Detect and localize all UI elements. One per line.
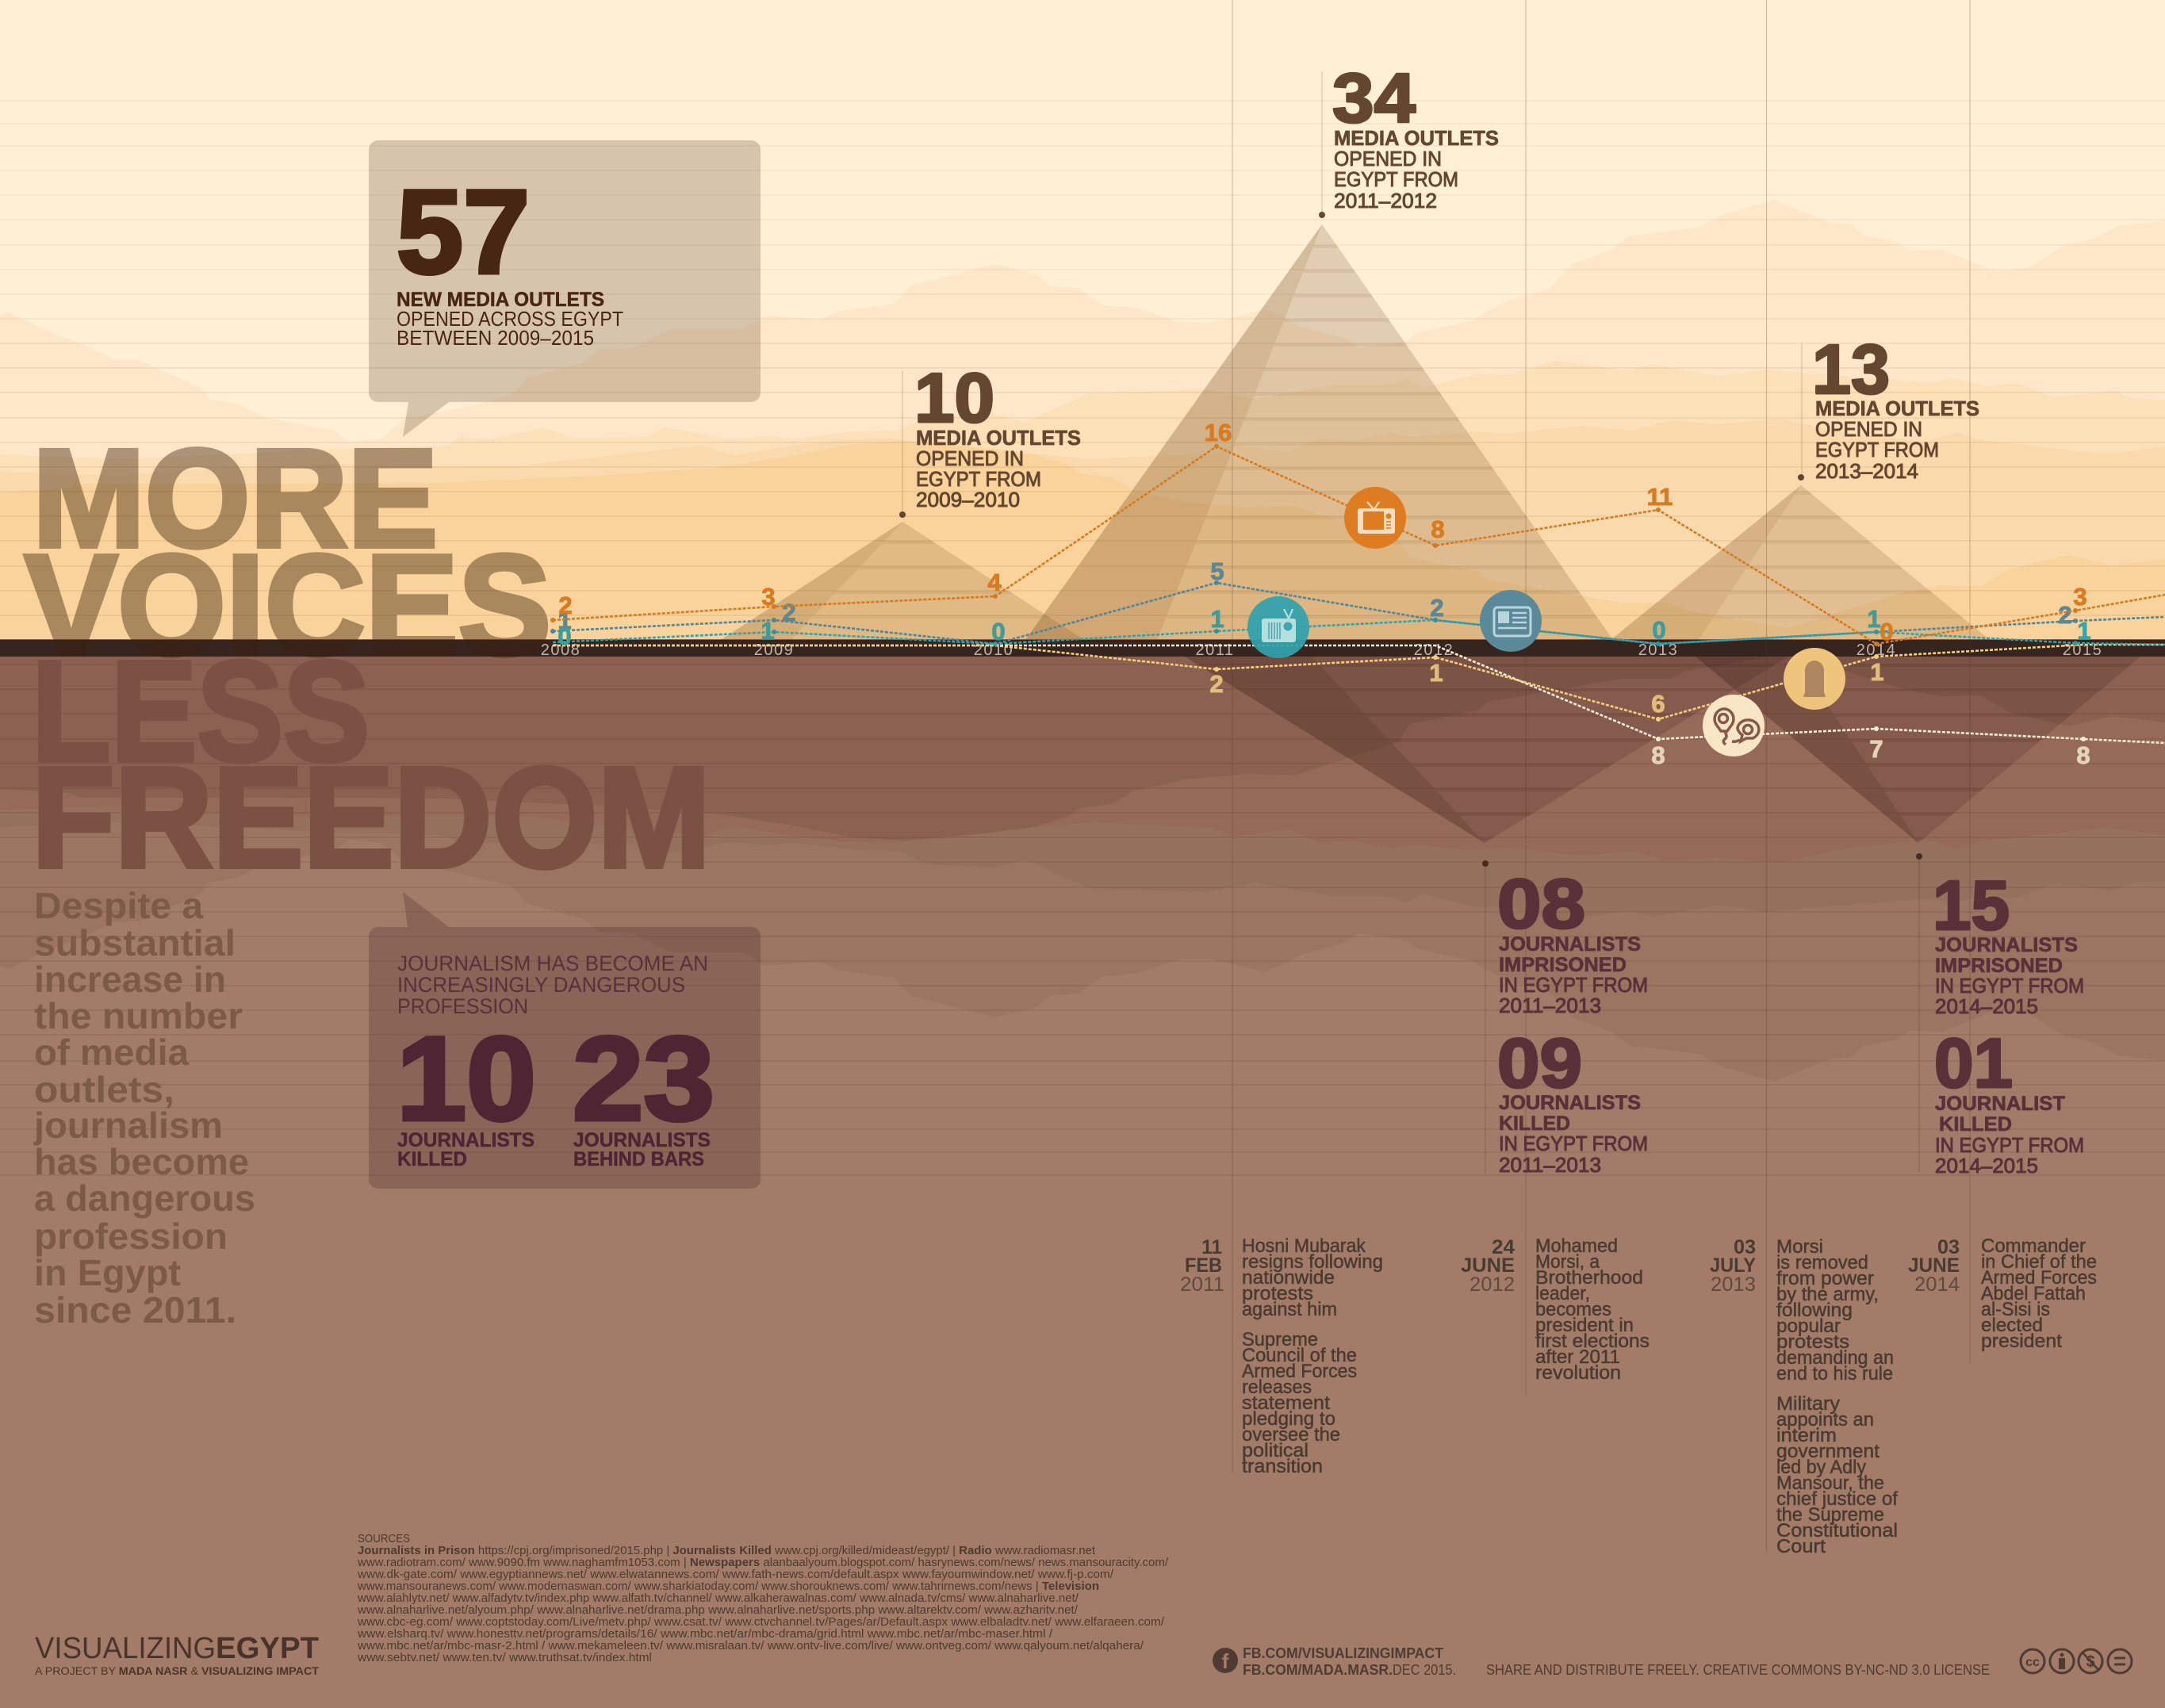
series: prisoners: 8 xyxy=(2076,741,2090,769)
description: statement xyxy=(1242,1392,1330,1414)
series: television: 3 xyxy=(761,583,776,611)
logo: Visualizing Egypt xyxy=(35,1632,319,1677)
stat: 01 killed: JOURNALIST xyxy=(1935,1093,2065,1115)
callout: 10 media outlets 2009-2010: EGYPT FROM xyxy=(916,467,1041,491)
panel intro: INCREASINGLY DANGEROUS xyxy=(397,973,685,997)
title word FREEDOM: FREEDOM xyxy=(32,738,711,898)
stat: 09 killed xyxy=(1497,1024,1648,1177)
stat: 01 killed: 01 xyxy=(1934,1024,2013,1102)
panel caption xyxy=(397,289,623,350)
stat: 08 imprisoned: 2011–2013 xyxy=(1499,994,1601,1017)
description: Brotherhood xyxy=(1535,1267,1643,1289)
series: newspapers: 2 xyxy=(1430,594,1444,622)
description: Morsi, a xyxy=(1535,1251,1600,1273)
event: 24 June 2012 xyxy=(1461,1235,1650,1384)
description: al-Sisi is xyxy=(1981,1299,2050,1320)
date: 2013 xyxy=(1711,1273,1756,1296)
callout: 13 media outlets 2013-2014: 2013–2014 xyxy=(1815,459,1918,483)
panel intro xyxy=(397,952,708,1018)
sources: www.elsharq.tv/ www.honesttv.net/programs/details/16/ www.mbc.net/ar/mbc-drama/grid.html www.mbc.net/ar/mbc-maser.html / xyxy=(357,1627,1053,1641)
callout: 34 media outlets 2011-2012: 2011–2012 xyxy=(1334,189,1437,213)
intro paragraph: a dangerous xyxy=(34,1178,255,1219)
date: 2012 xyxy=(1470,1273,1515,1296)
callout: 34 media outlets 2011-2012: MEDIA OUTLETS xyxy=(1334,126,1499,150)
description: against him xyxy=(1242,1299,1337,1320)
series: newspapers: 5 xyxy=(1210,557,1224,585)
stat: 01 killed: 2014–2015 xyxy=(1935,1154,2038,1178)
panel: dangerous profession xyxy=(369,892,761,1189)
line chart xyxy=(550,419,2165,769)
icon: creative commons badges: cc xyxy=(2025,1656,2040,1669)
sources: SOURCES xyxy=(358,1532,410,1545)
sources: www.cbc-eg.com/ www.coptstoday.com/Live/metv.php/ www.csat.tv/ www.ctvchannel.tv/Pages/ar/Default.aspx www.elbaladtv.net/ www.elfaraeen.com/ xyxy=(357,1615,1165,1629)
description: Armed Forces xyxy=(1981,1267,2097,1289)
year axis labels: 2014 xyxy=(1857,641,1896,659)
date: JUNE xyxy=(1461,1254,1515,1277)
description: Morsi xyxy=(1776,1236,1823,1258)
series: radio xyxy=(553,605,2165,650)
stat: 09 killed: 2011–2013 xyxy=(1499,1153,1601,1177)
series: prisoners xyxy=(553,645,2165,769)
sources: www.sebtv.net/ www.ten.tv/ www.truthsat.tv/index.html xyxy=(357,1651,652,1664)
series: television: 0 xyxy=(1880,618,1894,645)
series: television: 4 xyxy=(987,569,1002,596)
description: Mohamed xyxy=(1535,1235,1618,1257)
icon: television xyxy=(1344,487,1406,549)
description: interim xyxy=(1776,1425,1837,1446)
callout: 15 and 01 journalists 2014-2015 xyxy=(1916,853,2084,1178)
callout: 13 media outlets 2013-2014 xyxy=(1798,330,1979,483)
year axis labels: 2013 xyxy=(1638,641,1678,659)
stat: 01 killed: KILLED xyxy=(1939,1113,2012,1135)
logo: Visualizing Egypt: A PROJECT BY MADA NASR & VISUALIZING IMPACT xyxy=(35,1664,319,1677)
pyramid 2013-2014 xyxy=(1613,485,1989,640)
panel intro: PROFESSION xyxy=(397,994,528,1018)
footer: social links xyxy=(1213,1645,1456,1678)
panel caption: NEW MEDIA OUTLETS xyxy=(397,289,604,311)
intro paragraph: profession xyxy=(34,1216,228,1257)
series: television: 11 xyxy=(1647,483,1673,511)
callout: 08 and 09 journalists 2011-2013 xyxy=(1482,860,1648,1177)
description: Council of the xyxy=(1242,1345,1357,1366)
icon: facebook: f xyxy=(1222,1649,1229,1673)
panel intro: JOURNALISM HAS BECOME AN xyxy=(397,952,708,975)
stat: 10 journalists killed: KILLED xyxy=(397,1148,467,1170)
upper desert mountain layers xyxy=(0,200,2165,642)
intro paragraph: since 2011. xyxy=(34,1289,236,1331)
series: radio: 1 xyxy=(2077,617,2091,645)
description: by the army, xyxy=(1776,1284,1879,1305)
description: leader, xyxy=(1535,1283,1590,1304)
stat: 23 journalists behind bars: JOURNALISTS xyxy=(573,1129,711,1151)
background ground xyxy=(0,641,2165,1708)
date xyxy=(1180,1236,1224,1296)
icon: creative commons badges: $ xyxy=(2086,1653,2095,1671)
icon: handcuffs xyxy=(1703,695,1765,756)
description: popular xyxy=(1776,1315,1841,1337)
series: radio: 1 xyxy=(1210,605,1224,633)
description: led by Adly xyxy=(1776,1457,1866,1478)
date: 03 xyxy=(1937,1236,1960,1258)
stat: 15 imprisoned: 15 xyxy=(1933,866,2010,944)
upper pyramids xyxy=(714,224,2062,640)
stat: 08 imprisoned: IMPRISONED xyxy=(1499,954,1627,976)
pyramid 2009-2010 xyxy=(714,522,1110,640)
description: Mansour, the xyxy=(1776,1472,1884,1494)
footer: social links: FB.COM/MADA.MASR. xyxy=(1243,1662,1393,1678)
big number 57: 57 xyxy=(397,165,530,298)
year axis labels: 2009 xyxy=(754,641,794,659)
footer: license text: SHARE AND DISTRIBUTE FREELY. CREATIVE COMMONS BY-NC-ND 3.0 LICENSE xyxy=(1486,1662,1990,1678)
icon: creative commons badges xyxy=(2021,1649,2132,1673)
series: radio: 0 xyxy=(991,618,1006,645)
sources: www.dk-gate.com/ www.egyptiannews.net/ www.elwatannews.com/ www.fath-news.com/default.aspx www.fayoumwindow.net/ www.fj-p.com/ xyxy=(357,1568,1114,1581)
logo: Visualizing Egypt: EGYPT xyxy=(216,1632,319,1665)
series: television: 8 xyxy=(1431,515,1445,543)
callout: 13 media outlets 2013-2014: MEDIA OUTLETS xyxy=(1815,396,1979,420)
stat: 10 journalists killed: 10 xyxy=(397,1012,536,1145)
pyramid 2011-2012 xyxy=(1025,224,1665,640)
stat: 09 killed: JOURNALISTS xyxy=(1499,1092,1641,1114)
description: end to his rule xyxy=(1776,1363,1893,1384)
footer: social links: FB.COM/VISUALIZINGIMPACT xyxy=(1243,1645,1443,1661)
date xyxy=(1908,1236,1960,1296)
stat: 08 imprisoned: 08 xyxy=(1497,864,1585,943)
title word VOICES: VOICES xyxy=(25,526,551,685)
date: JULY xyxy=(1710,1254,1756,1277)
year axis labels: 2008 xyxy=(541,641,581,659)
series: television: 2 xyxy=(558,592,573,619)
description: pledging to xyxy=(1242,1408,1335,1430)
callout: 10 media outlets 2009-2010: OPENED IN xyxy=(916,446,1024,470)
logo: Visualizing Egypt: VISUALIZING xyxy=(35,1632,216,1665)
series: radio: 0 xyxy=(1652,616,1666,644)
date: 2011 xyxy=(1180,1273,1224,1296)
series: journalists killed: 1 xyxy=(1429,659,1443,687)
inverted pyramid 2011-2013 xyxy=(1185,657,1824,843)
description: Military xyxy=(1776,1393,1840,1415)
date: JUNE xyxy=(1908,1254,1960,1277)
sources: www.mansouranews.com/ www.modernaswan.com/ www.sharkiatoday.com/ www.shorouknews.com/ www.tahrirnews.com/news | Television xyxy=(357,1580,1099,1593)
series: newspapers: 2 xyxy=(2058,601,2072,629)
icon: newspaper xyxy=(1480,590,1542,652)
year axis labels: 2015 xyxy=(2063,641,2102,659)
description: president in xyxy=(1535,1315,1634,1336)
series: television: 3 xyxy=(2073,583,2087,611)
series: radio: 0 xyxy=(558,622,572,650)
callout: 34 media outlets 2011-2012: 34 xyxy=(1332,59,1416,137)
icon: facebook xyxy=(1213,1648,1238,1673)
date: 24 xyxy=(1492,1236,1515,1258)
series: television: 16 xyxy=(1205,419,1232,446)
description: president xyxy=(1981,1331,2062,1352)
event: 03 July 2013 xyxy=(1710,1236,1898,1557)
description xyxy=(1242,1235,1383,1477)
stat: 08 imprisoned xyxy=(1497,864,1648,1017)
description: from power xyxy=(1776,1268,1874,1289)
date: 2014 xyxy=(1914,1273,1960,1296)
lower reflected mountain layers xyxy=(0,639,2165,1082)
icon: radio xyxy=(1247,596,1309,658)
stat: 01 killed: IN EGYPT FROM xyxy=(1935,1133,2084,1157)
stat: 15 imprisoned xyxy=(1933,866,2084,1018)
intro paragraph: journalism xyxy=(33,1105,223,1146)
description: protests xyxy=(1242,1283,1313,1304)
callout: 34 media outlets 2011-2012: EGYPT FROM xyxy=(1334,167,1458,191)
description xyxy=(1981,1235,2097,1352)
sources xyxy=(357,1532,1169,1664)
sources: www.radiotram.com/ www.9090.fm www.naghamfm1053.com | Newspapers alanbaalyoum.blogspot.com/ hasrynews.com/news/ news.mansouracity.com/ xyxy=(357,1556,1169,1569)
description: Hosni Mubarak xyxy=(1242,1235,1366,1257)
stat: 23 journalists behind bars: 23 xyxy=(573,1012,715,1145)
sources: www.alnaharlive.net/alyoum.php/ www.alnaharlive.net/drama.php www.alnaharlive.net/sports.php www.altarektv.com/ www.azharitv.net/ xyxy=(357,1603,1079,1617)
event: 03 June 2014 xyxy=(1908,1235,2097,1352)
date: 03 xyxy=(1734,1236,1756,1258)
description: the Supreme xyxy=(1776,1504,1884,1526)
callout: 10 media outlets 2009-2010: 10 xyxy=(914,358,994,437)
series: newspapers xyxy=(550,557,2165,646)
series: journalists killed: 6 xyxy=(1651,690,1665,718)
description: political xyxy=(1242,1440,1309,1461)
series: prisoners: 7 xyxy=(1869,735,1883,763)
title word LESS: LESS xyxy=(32,632,370,791)
stat: 15 imprisoned: JOURNALISTS xyxy=(1935,934,2078,956)
date: FEB xyxy=(1185,1254,1222,1277)
event: 11 Feb 2011 xyxy=(1180,1235,1383,1477)
year axis labels: 2011 xyxy=(1195,641,1235,659)
description: in Chief of the xyxy=(1981,1251,2097,1273)
description: Court xyxy=(1776,1536,1826,1557)
stat: 08 imprisoned: JOURNALISTS xyxy=(1499,933,1641,955)
description: nationwide xyxy=(1242,1267,1335,1289)
series: journalists killed: 1 xyxy=(1870,658,1884,686)
stat: 09 killed: KILLED xyxy=(1499,1112,1570,1135)
stat: 15 imprisoned: IN EGYPT FROM xyxy=(1935,974,2084,998)
intro paragraph: increase in xyxy=(34,959,226,1000)
callout: 13 media outlets 2013-2014: 13 xyxy=(1812,330,1890,408)
stat: 09 killed: 09 xyxy=(1497,1024,1582,1102)
series: radio: 1 xyxy=(761,617,775,645)
stat: 15 imprisoned: IMPRISONED xyxy=(1935,955,2063,977)
description: government xyxy=(1776,1441,1880,1462)
series: newspapers: 2 xyxy=(782,599,796,626)
intro paragraph: outlets, xyxy=(34,1069,174,1110)
intro paragraph: the number xyxy=(34,995,243,1036)
series: television xyxy=(550,419,2165,646)
description xyxy=(1776,1236,1898,1557)
year axis labels: 2010 xyxy=(974,641,1014,659)
description: Supreme xyxy=(1242,1329,1318,1350)
description: is removed xyxy=(1776,1252,1868,1273)
callout: 10 media outlets 2009-2010 xyxy=(899,358,1081,518)
description: appoints an xyxy=(1776,1409,1874,1430)
description: becomes xyxy=(1535,1299,1611,1320)
stat: 09 killed: IN EGYPT FROM xyxy=(1499,1132,1648,1155)
date xyxy=(1461,1236,1515,1296)
intro paragraph: substantial xyxy=(34,922,236,963)
series: prisoners: 8 xyxy=(1651,741,1665,769)
background sky xyxy=(0,0,2165,642)
speech bubble xyxy=(369,892,761,1189)
stat: 15 imprisoned: 2014–2015 xyxy=(1935,994,2038,1018)
stat: 08 imprisoned: IN EGYPT FROM xyxy=(1499,973,1648,997)
description: oversee the xyxy=(1242,1424,1340,1446)
callout: 34 media outlets 2011-2012 xyxy=(1319,59,1499,218)
speech bubble xyxy=(369,140,761,437)
panel caption: BETWEEN 2009–2015 xyxy=(397,326,594,350)
series: newspapers: 1 xyxy=(558,607,572,634)
description: resigns following xyxy=(1242,1251,1383,1273)
stat: 23 journalists behind bars: BEHIND BARS xyxy=(573,1148,704,1170)
intro paragraph: of media xyxy=(34,1032,189,1073)
description: transition xyxy=(1242,1456,1323,1477)
series: journalists killed: 2 xyxy=(1209,670,1224,698)
icon: bullet xyxy=(1784,648,1845,710)
description: Armed Forces xyxy=(1242,1361,1357,1382)
series: radio: 1 xyxy=(1867,605,1881,633)
year axis labels xyxy=(541,641,2102,659)
intro paragraph: has become xyxy=(34,1141,249,1182)
callout: 34 media outlets 2011-2012: OPENED IN xyxy=(1334,147,1442,170)
lower inverted pyramids xyxy=(1185,657,2157,843)
panel: 57 new media outlets xyxy=(369,140,761,437)
description xyxy=(1535,1235,1650,1384)
description: Abdel Fattah xyxy=(1981,1283,2086,1304)
callout: 10 media outlets 2009-2010: 2009–2010 xyxy=(916,488,1020,511)
sources: www.alahlytv.net/ www.alfadytv.tv/index.php www.alfath.tv/channel/ www.alkaherawalnas.com/ www.alnada.tv/cms/ www.alnaharlive.net/ xyxy=(357,1591,1079,1605)
stat: 01 killed xyxy=(1934,1024,2084,1178)
description: Constitutional xyxy=(1776,1520,1898,1541)
description: chief justice of xyxy=(1776,1488,1898,1510)
callout: 13 media outlets 2013-2014: OPENED IN xyxy=(1815,417,1922,441)
description: demanding an xyxy=(1776,1347,1894,1369)
title: More Voices xyxy=(25,421,551,685)
description: elected xyxy=(1981,1315,2043,1336)
series: journalists killed xyxy=(553,645,2165,722)
description: protests xyxy=(1776,1331,1849,1353)
inverted pyramid 2014-2015 xyxy=(1696,657,2157,843)
intro paragraph: Despite a xyxy=(34,885,203,926)
title: Less Freedom xyxy=(32,632,711,898)
year axis labels: 2012 xyxy=(1414,641,1454,659)
intro paragraph xyxy=(33,885,255,1331)
description: following xyxy=(1776,1300,1853,1321)
callout: 13 media outlets 2013-2014: EGYPT FROM xyxy=(1815,438,1939,461)
date: 11 xyxy=(1201,1236,1222,1258)
sources: www.mbc.net/ar/mbc-masr-2.html / www.mekameleen.tv/ www.misralaan.tv/ www.ontv-live.com/live/ www.ontveg.com/ www.qalyoum.net/alqahera/ xyxy=(357,1639,1144,1652)
intro paragraph: in Egypt xyxy=(34,1252,181,1293)
description: first elections xyxy=(1535,1331,1650,1352)
date xyxy=(1710,1236,1756,1296)
callout: 10 media outlets 2009-2010: MEDIA OUTLETS xyxy=(916,426,1081,450)
title word MORE: MORE xyxy=(33,421,438,576)
panel caption: OPENED ACROSS EGYPT xyxy=(397,307,623,331)
sources: Journalists in Prison https://cpj.org/imprisoned/2015.php | Journalists Killed www.cpj.org/killed/mideast/egypt/ | Radio www.radiomasr.net xyxy=(358,1544,1096,1557)
description: Commander xyxy=(1981,1235,2086,1257)
dark horizon band xyxy=(0,640,2165,657)
description: revolution xyxy=(1535,1362,1621,1384)
stat: 10 journalists killed: JOURNALISTS xyxy=(397,1129,535,1151)
footer: social links: DEC 2015. xyxy=(1393,1662,1456,1678)
description: after 2011 xyxy=(1535,1346,1620,1368)
description: releases xyxy=(1242,1377,1312,1398)
